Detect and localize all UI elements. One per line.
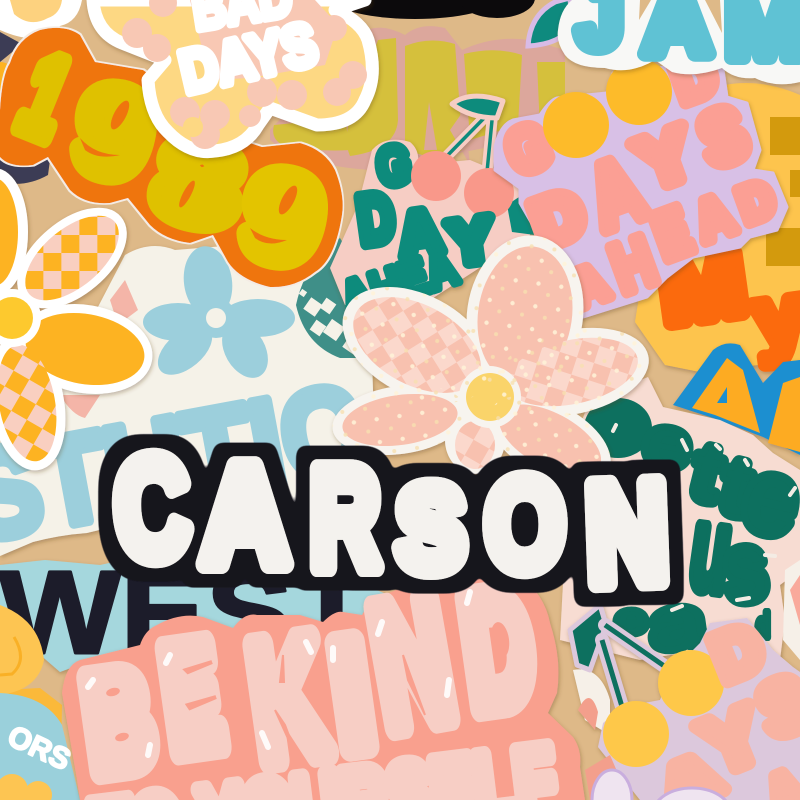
word: G: G: [373, 134, 415, 198]
sticker: CARSON: S: [397, 463, 465, 595]
holographic dots: [323, 228, 657, 503]
sticker: lilac good days ahead: D: [731, 170, 782, 234]
word: GOOD: G: [497, 110, 560, 189]
cherries: [603, 650, 724, 767]
sticker: better days ahead: d: [756, 607, 770, 645]
icon: disco ball: [296, 238, 408, 358]
sticker: orange My: [635, 83, 800, 372]
sticker: pink BE KIND: N: [359, 560, 465, 765]
sticker: CARSON: N: [583, 453, 671, 614]
sticker: lilac good days ahead: Y: [626, 112, 704, 206]
sticker: lilac good days ahead: H: [602, 222, 665, 307]
sticker: WEST on teal: [0, 547, 400, 679]
digit 9: 9: [67, 61, 161, 205]
petal: lower left: [339, 387, 461, 453]
word: better: e: [640, 404, 696, 483]
sticker: lilac bottom right: Y: [689, 689, 775, 792]
sticker: cream right edge: [783, 560, 800, 660]
sticker: teal good days ahead: [330, 96, 535, 328]
petal: top: [469, 240, 581, 390]
sticker: lilac good days ahead: E: [643, 192, 701, 274]
petal: orange right: [20, 304, 150, 394]
word: ahead: e: [617, 599, 645, 641]
sticker: better days ahead: t: [713, 440, 760, 532]
white sticker peek: [573, 669, 610, 735]
icon: yellow flower: [0, 774, 52, 800]
sticker: pink BE KIND: E: [153, 611, 231, 784]
word: My: M: [654, 233, 751, 343]
letter: b: [584, 398, 652, 458]
sticker: yellow smiley left: [0, 605, 62, 800]
sticker: lilac good days ahead: A: [576, 138, 657, 249]
sticker: CARSON: [111, 427, 671, 614]
word: AHEAD: AHEA: [335, 238, 464, 328]
sticker: black glasses at top: [335, 0, 535, 19]
flower centre: [459, 366, 521, 428]
word: DAYS: D: [522, 175, 594, 261]
sticker: pink BE KIND: [62, 556, 585, 800]
sticker: orange daisy left: [0, 176, 150, 467]
sticker: orange 1989: [0, 28, 343, 290]
sticker: teal good days ahead: A: [394, 196, 446, 270]
petal: checked left: [337, 277, 497, 413]
sticker: bad days flower: [93, 0, 372, 152]
petal: lower right: [488, 390, 612, 490]
sticker: better days ahead: s: [720, 515, 771, 621]
word: CARSON: C: [111, 427, 193, 590]
word: DAYS: D: [701, 609, 773, 695]
icon: teal cherry stem: [445, 96, 503, 172]
digit 9: 9: [234, 146, 331, 290]
peek letter: [507, 195, 535, 235]
sticker: blue and orange A: [673, 343, 800, 455]
word: DAY: D: [353, 179, 399, 259]
sticker: lilac bottom right: [570, 605, 800, 800]
sticker: lilac good days ahead: D: [666, 45, 724, 115]
cherries: [543, 59, 672, 158]
digit 1: 1: [4, 31, 86, 162]
cherries: [411, 151, 514, 218]
highlights: [88, 592, 470, 755]
sticker: cream TISTIC with flower: [0, 240, 375, 568]
sticker: lilac good days ahead: S: [688, 90, 758, 183]
sticker: lilac good days ahead: A: [686, 182, 742, 253]
sticker: better days ahead: t: [684, 426, 731, 518]
sticker: pink peek behind flower: [60, 395, 100, 418]
sticker: better days ahead: [560, 377, 800, 662]
word: WEST: WEST: [0, 547, 371, 679]
digit eyes: [80, 98, 301, 244]
sticker: dark pieces behind 1989: [0, 32, 50, 184]
icon: teal leaf top: [528, 0, 572, 46]
letter details: [105, 621, 511, 765]
sticker: top-left pale flower: [0, 0, 82, 38]
flower centre: [0, 289, 41, 347]
sticker: Jay top right: [558, 0, 800, 84]
digit 8: 8: [149, 115, 248, 250]
sticker: lilac-ring ellipses bottom: [585, 755, 730, 800]
sticker: pink and olive MM: [270, 26, 565, 170]
sticker: CARSON: R: [310, 439, 380, 598]
sticker: CARSON: A: [201, 436, 289, 595]
highlights: [613, 425, 795, 610]
word: AHEAD: A: [562, 253, 615, 318]
sticker: blue HORS bottom left: [0, 693, 80, 800]
word: BE: B: [76, 642, 162, 800]
sticker: blue HORS bottom left: ORS: [3, 720, 75, 777]
petal: checked upper: [10, 200, 134, 316]
word: DAYS: DAYS: [174, 10, 323, 106]
word: KIND: K: [239, 603, 337, 797]
petal: checked lower: [0, 340, 65, 466]
sticker: holographic flower: [323, 228, 657, 503]
sticker: pink BE KIND: D: [452, 556, 544, 743]
sticker: better days ahead: a: [649, 584, 707, 662]
icon: blue flower: [143, 243, 295, 386]
sticker: lilac good days ahead: [495, 45, 787, 318]
sticker: pink BE KIND: I: [322, 607, 382, 783]
sticker: teal good days ahead: Y: [444, 204, 498, 278]
petal: checked right: [500, 327, 644, 417]
word: days: u: [683, 484, 739, 616]
icon: cherry stem and leaf: [570, 605, 670, 710]
sticker: CARSON: O: [485, 451, 565, 597]
